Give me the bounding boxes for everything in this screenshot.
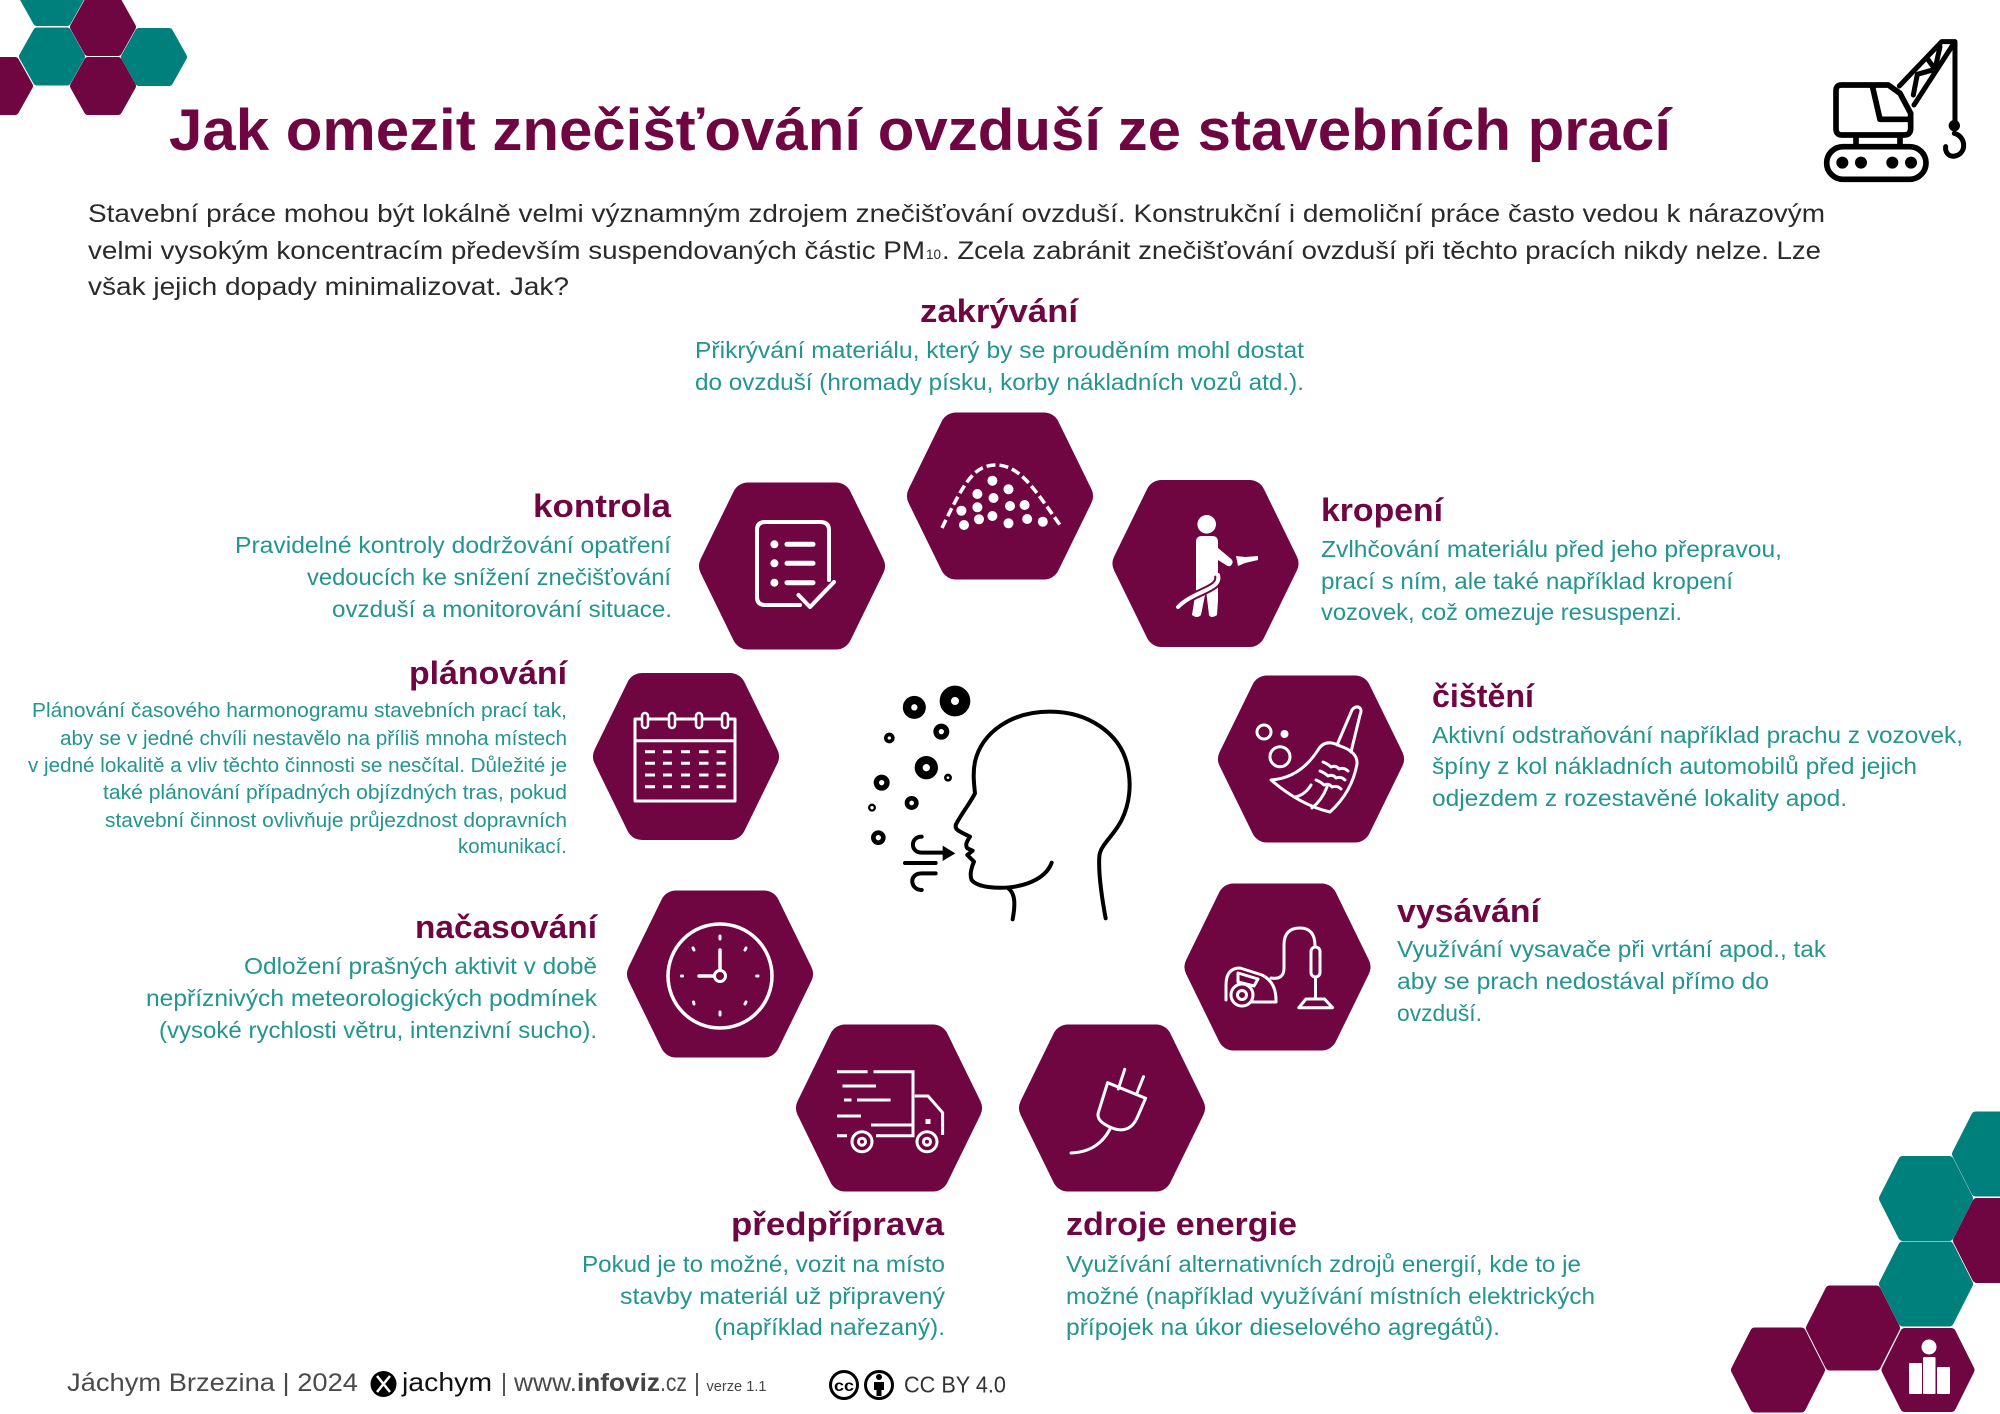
text: plánování: v jedné lokalitě a vliv těchto činnosti se nesčítal. Důležité je: [28, 754, 567, 777]
text: kropení: prací s ním, ale také například kropení: [1321, 568, 1733, 594]
panel: načasování: [146, 906, 797, 1043]
text: čištění: odjezdem z rozestavěné lokality apod.: [1432, 785, 1847, 811]
text: předpříprava: Pokud je to možné, vozit na místo: [582, 1251, 945, 1277]
text: načasování: (vysoké rychlosti větru, intenzivní sucho).: [159, 1017, 597, 1043]
text: vysávání: ovzduší.: [1397, 1000, 1482, 1026]
intro text: však jejich dopady minimalizovat. Jak?: [88, 273, 569, 301]
text: plánování: stavební činnost ovlivňuje průjezdnost dopravních: [105, 809, 567, 832]
text: plánování: [28, 699, 567, 858]
text: zakrývání: [695, 337, 1304, 395]
text: vysávání: Využívání vysavače při vrtání apod., tak: [1397, 936, 1826, 962]
text: zakrývání: Přikrývání materiálu, který by se prouděním mohl dostat: [695, 337, 1304, 363]
text: plánování: také plánování případných objízdných tras, pokud: [103, 781, 567, 804]
text: kontrola: [235, 532, 672, 622]
footer: license CC BY 4.0: cc: [834, 1378, 854, 1395]
icon: infoviz logo hexagon: [1886, 1333, 1970, 1407]
heading: kontrola: kontrola: [533, 488, 671, 524]
panel: zdroje energie: [1035, 1040, 1595, 1340]
text: předpříprava: [582, 1251, 945, 1340]
panel: kropení: [1128, 492, 1782, 631]
footer: credits: |: [501, 1369, 507, 1397]
heading: předpříprava: předpříprava: [731, 1206, 944, 1242]
heading: zdroje energie: zdroje energie: [1066, 1206, 1297, 1242]
intro text: [88, 200, 1825, 301]
panel: plánování: [28, 655, 763, 858]
heading: čištění: čištění: [1432, 678, 1535, 714]
text: kontrola: Pravidelné kontroly dodržování opatření: [235, 532, 671, 558]
intro text: velmi vysokým koncentracím především suspendovaných částic PM: [88, 237, 925, 265]
hexagon icon: power plug: [1035, 1040, 1189, 1176]
intro text: Stavební práce mohou být lokálně velmi významným zdrojem znečišťování ovzduší. Konstrukční i demoliční práce často vedou k nárazovým: [88, 200, 1825, 228]
text: čištění: špíny z kol nákladních automobilů před jejich: [1432, 753, 1917, 779]
text: kontrola: ovzduší a monitorování situace.: [332, 596, 672, 622]
panel: čištění: [1234, 678, 1963, 826]
text: předpříprava: (například nařezaný).: [714, 1314, 945, 1340]
heading: zakrývání: zakrývání: [920, 293, 1079, 329]
text: zakrývání: do ovzduší (hromady písku, korby nákladních vozů atd.).: [695, 369, 1304, 395]
footer: license CC BY 4.0: [830, 1372, 1006, 1398]
title: Jak omezit znečišťování ovzduší ze stavebních prací: [169, 98, 1673, 163]
hexagon icon: pile of material: [923, 428, 1077, 564]
heading: kropení: kropení: [1321, 492, 1444, 528]
footer: credits: jachym: [401, 1367, 492, 1397]
hexagon icon: broom: [1234, 692, 1388, 826]
footer: credits: infoviz: [577, 1369, 660, 1397]
text: kropení: vozovek, což omezuje resuspenzi.: [1321, 599, 1682, 625]
hexagon icon: clock: [643, 906, 797, 1042]
footer: credits: [67, 1367, 766, 1397]
text: čištění: Aktivní odstraňování například prachu z vozovek,: [1432, 722, 1963, 748]
intro text: 10: [926, 246, 941, 262]
hexagon icon: vacuum cleaner: [1200, 900, 1354, 1034]
hexagon icon: calendar: [609, 689, 763, 824]
decorative hexagons: bottom right: [1736, 1116, 2000, 1408]
footer: credits: www.: [513, 1369, 577, 1397]
text: vysávání: [1397, 936, 1826, 1026]
text: kropení: Zvlhčování materiálu před jeho přepravou,: [1321, 536, 1782, 562]
icon: head inhaling dust particles: [869, 691, 1130, 919]
text: čištění: [1432, 722, 1963, 811]
text: plánování: aby se v jedné chvíli nestavělo na příliš mnoha místech: [60, 727, 567, 750]
text: vysávání: aby se prach nedostával přímo do: [1397, 968, 1769, 994]
text: kropení: [1321, 536, 1782, 625]
text: zdroje energie: možné (například využívání místních elektrických: [1066, 1283, 1595, 1309]
panel: předpříprava: [582, 1040, 966, 1340]
text: zdroje energie: Využívání alternativních zdrojů energií, kde to je: [1066, 1251, 1581, 1277]
text: zdroje energie: [1066, 1251, 1595, 1340]
footer: license CC BY 4.0: CC BY 4.0: [904, 1372, 1006, 1398]
heading: načasování: načasování: [415, 909, 598, 945]
footer: credits: .cz: [660, 1369, 687, 1397]
icon: X logo: [370, 1371, 396, 1397]
panel: vysávání: [1200, 893, 1826, 1034]
panel: zakrývání: [695, 293, 1304, 564]
text: načasování: [146, 953, 597, 1043]
text: zdroje energie: přípojek na úkor dieselového agregátů).: [1066, 1314, 1500, 1340]
heading: plánování: plánování: [409, 655, 568, 691]
text: kontrola: vedoucích ke snížení znečišťování: [307, 564, 671, 590]
text: plánování: Plánování časového harmonogramu stavebních prací tak,: [32, 699, 567, 722]
hexagon icon: checklist: [715, 498, 869, 634]
footer: credits: verze 1.1: [706, 1378, 766, 1395]
hexagon icon: delivery truck: [812, 1040, 966, 1176]
heading: vysávání: vysávání: [1397, 893, 1541, 929]
hexagon icon: person spraying water: [1128, 496, 1282, 631]
text: načasování: nepříznivých meteorologických podmínek: [146, 985, 597, 1011]
decorative hexagons: top left: [0, 0, 183, 111]
footer: credits: |: [694, 1369, 700, 1397]
text: načasování: Odložení prašných aktivit v době: [244, 953, 597, 979]
text: předpříprava: stavby materiál už připravený: [620, 1283, 945, 1309]
intro text: . Zcela zabránit znečišťování ovzduší při těchto pracích nikdy nelze. Lze: [942, 237, 1821, 265]
text: plánování: komunikací.: [458, 835, 567, 858]
panel: kontrola: [235, 488, 869, 634]
footer: credits: Jáchym Brzezina | 2024: [67, 1369, 358, 1397]
icon: crawler crane: [1827, 42, 1964, 179]
